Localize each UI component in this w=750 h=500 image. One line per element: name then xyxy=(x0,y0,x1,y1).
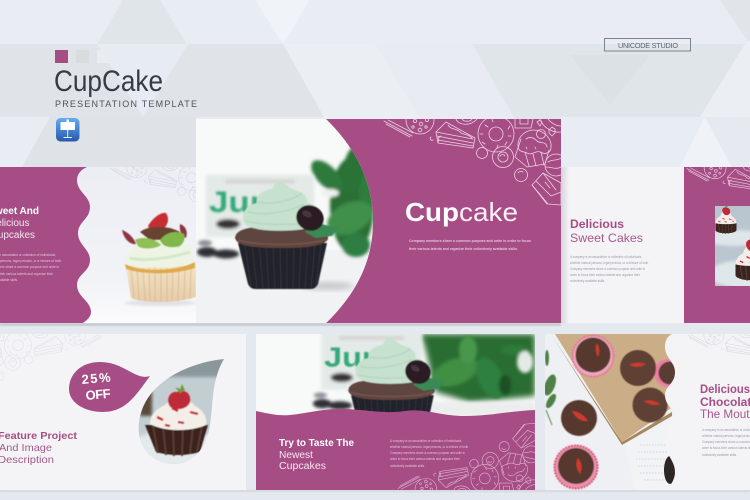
badge: unicode studio: UNICODE STUDIO xyxy=(618,41,678,50)
callout: 25% off: 25% xyxy=(81,369,112,387)
slide body text: Company members share a common purpose and unite in xyxy=(570,267,645,271)
badge: unicode studio xyxy=(604,38,690,51)
slide body text: Company members share a common purpose and unite in xyxy=(390,451,465,455)
cover body text xyxy=(409,240,531,251)
slide body text: collectively available skills. xyxy=(702,453,737,457)
slide heading xyxy=(0,206,39,241)
callout: 25% off: OFF xyxy=(85,386,111,403)
subtitle: PRESENTATION TEMPLATE xyxy=(55,99,197,109)
wavy purple band xyxy=(0,167,91,323)
photo: cupcake with strawberry xyxy=(122,213,196,306)
slide body text xyxy=(0,253,62,282)
slide body text: A company is an association or collection of individuals, xyxy=(390,439,462,443)
slide heading xyxy=(570,219,642,242)
swatch: grey xyxy=(76,50,89,63)
photo: teardrop cupcake xyxy=(138,359,224,464)
lace doily xyxy=(636,444,666,480)
panel: bottom centre slide, try to taste xyxy=(256,332,540,500)
photo: chocolate muffins on wooden board xyxy=(545,334,675,490)
slide body text: whether natural persons, legal persons, or a mixture of both. xyxy=(570,261,649,265)
mint leaves xyxy=(545,350,557,426)
slide body text xyxy=(390,439,469,468)
panel: left slide, sweet and delicious cupcakes xyxy=(0,167,196,323)
slide heading: Try to Taste The xyxy=(279,438,354,449)
slide body text xyxy=(570,255,649,283)
doodle: sweets line art xyxy=(398,423,535,490)
slide body text: collectively available skills. xyxy=(570,279,605,283)
title: CupCake xyxy=(54,65,163,98)
cover title xyxy=(406,202,517,226)
muffin 5 xyxy=(561,400,597,436)
frosting xyxy=(150,400,206,430)
panel: bottom right slide, delicious chocolate xyxy=(542,325,750,490)
slide heading: Sweet Cakes xyxy=(570,231,643,245)
slide heading: And Image xyxy=(0,442,52,454)
slide body text: order to focus their various talents and organize their xyxy=(390,457,461,461)
slide heading: Delicious xyxy=(570,217,624,231)
swatch: purple xyxy=(55,50,68,63)
swatch: white xyxy=(97,50,110,63)
doodle: sweets line art xyxy=(384,119,561,206)
muffin 3 xyxy=(620,350,656,386)
muffin 6 xyxy=(554,446,598,488)
slide body text: whether natural persons, legal persons, or a mixture of both. xyxy=(390,445,469,449)
slide body text xyxy=(702,428,750,457)
deck logo: colour swatches, title and subtitle xyxy=(54,50,197,109)
callout: 25% off xyxy=(69,362,150,412)
panel: right slide, delicious sweet cakes xyxy=(561,157,750,323)
photo: mint chocolate cupcake xyxy=(196,119,378,323)
slide heading xyxy=(279,438,354,472)
wavy content panel xyxy=(665,334,690,484)
muffin 2 xyxy=(654,358,675,388)
muffin 1 xyxy=(572,336,614,376)
icon: keynote app xyxy=(56,118,80,142)
panel: centre main slide, cupcake cover xyxy=(196,106,567,323)
muffin 4 xyxy=(632,388,668,422)
slide body text: order to focus their various talents and organize their xyxy=(570,273,641,277)
slide body text: A company is an association or collection of individuals, xyxy=(570,255,642,259)
slide heading xyxy=(0,430,78,466)
cover body text: their various talents and organize their collectively available skills. xyxy=(409,246,518,251)
cover title: cake xyxy=(459,197,518,227)
slide heading: Cupcakes xyxy=(279,461,326,472)
photo: mint cupcake with leaves xyxy=(310,334,535,415)
chocolate cup xyxy=(145,425,208,455)
wavy purple band xyxy=(256,409,535,490)
slide heading: Feature Project xyxy=(0,430,78,442)
slide heading xyxy=(700,384,750,418)
photo: red velvet cupcakes xyxy=(715,206,750,286)
slide body text: collectively available skills. xyxy=(390,464,425,468)
purple side panel xyxy=(684,157,750,323)
panel: bottom left slide, feature project xyxy=(0,324,246,490)
slide heading: Newest xyxy=(279,450,313,461)
cover body text: Company members share a common purpose and unite in order to focus xyxy=(409,238,532,243)
cover title: Cup xyxy=(405,197,459,227)
